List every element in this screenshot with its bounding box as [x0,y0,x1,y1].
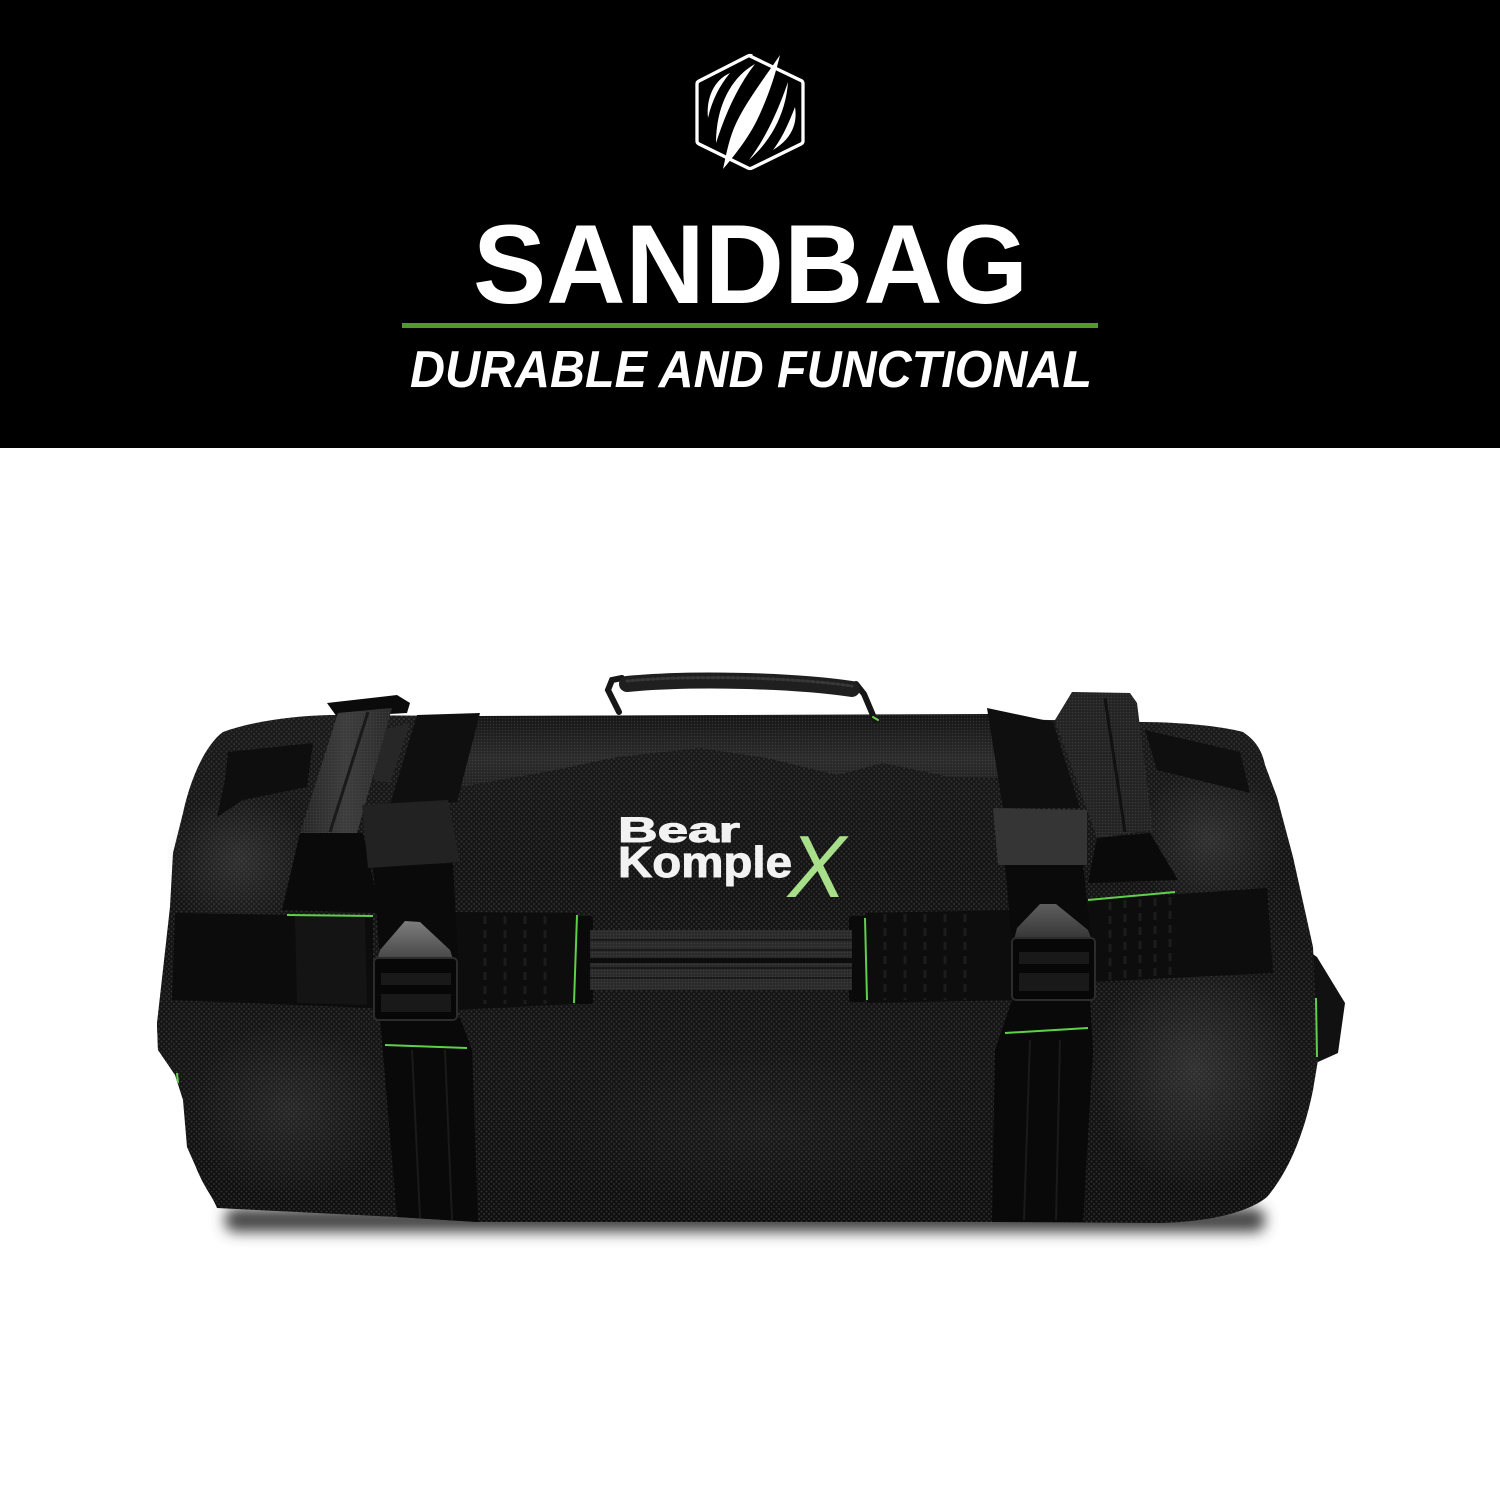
green divider [402,323,1098,328]
icon: hexagon claw-mark logo [697,55,803,169]
horizontal band left [172,913,373,1008]
left velcro tab [362,800,460,868]
left vertical strap [373,713,480,1222]
bag side pocket right [1300,945,1345,1065]
horizontal band centre-right [865,910,1015,1003]
right velcro tab [993,808,1087,865]
top carry handle [608,678,878,720]
centre grab handle [575,916,866,1004]
subtitle: DURABLE AND FUNCTIONAL [410,341,1092,399]
embroidered brand logo: Komple [618,838,792,887]
top flap [460,714,1000,787]
green stitching [177,892,1317,1083]
embroidered brand logo [618,811,849,916]
right vertical strap [987,708,1093,1222]
horizontal band right [1088,888,1273,982]
corner patch right [1145,730,1250,793]
right grip handle [1038,692,1178,883]
header panel [0,0,1500,448]
embroidered brand logo: Bear [618,811,741,850]
corner patch left [217,743,313,817]
title: SANDBAG [473,202,1028,327]
bag body [157,715,1318,1223]
ground shadow [225,1208,1265,1232]
horizontal band centre-left [455,912,577,1010]
left buckle [374,921,457,1020]
left grip handle [282,695,410,913]
bag side pocket left [157,1000,195,1073]
product photo: sandbag [157,678,1345,1232]
right buckle [1012,904,1095,1000]
embroidered brand logo: X [786,817,849,916]
